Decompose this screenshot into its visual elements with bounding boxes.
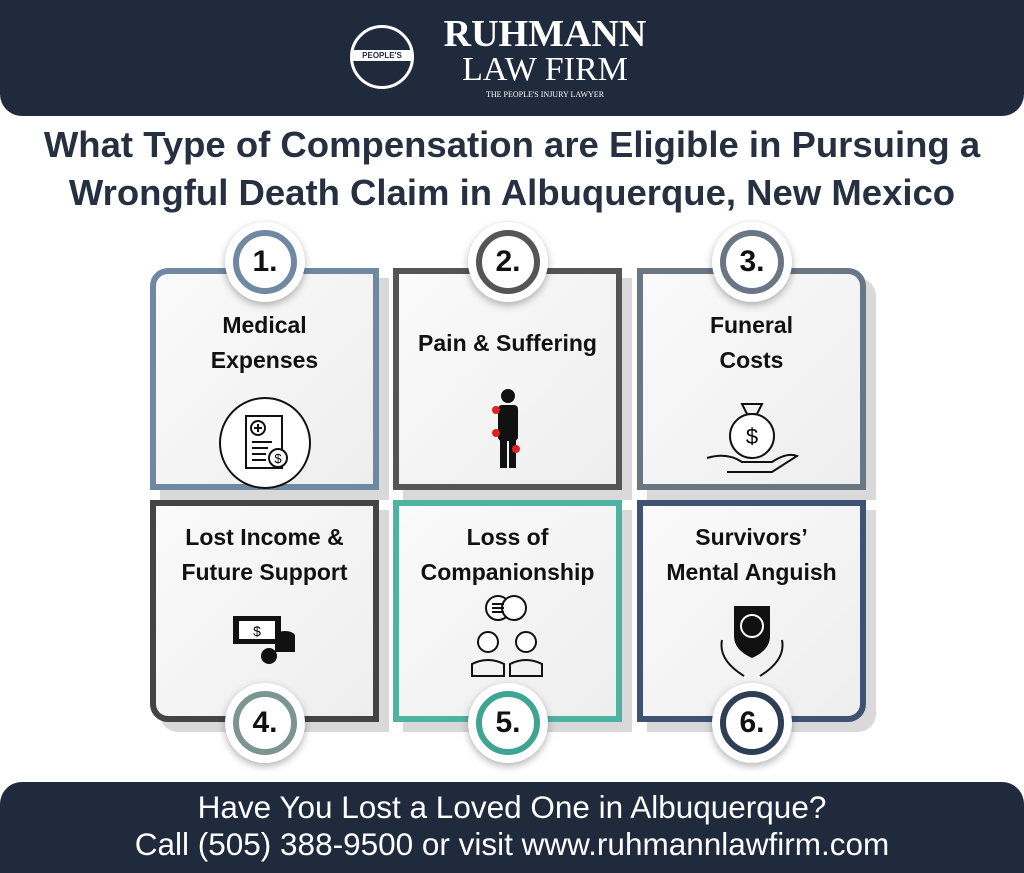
heading: Future Support	[181, 559, 348, 585]
heading: Medical	[222, 312, 307, 338]
heading: Expenses	[211, 347, 318, 373]
badge 3	[712, 222, 792, 302]
badge 6: 6.	[739, 706, 765, 739]
heading	[421, 524, 594, 585]
icon: cash and coins: $	[253, 623, 261, 639]
badge 5: 5.	[495, 706, 521, 739]
icon: cash and coins	[233, 616, 295, 664]
heading: Loss of	[467, 524, 548, 550]
badge 1: 1.	[252, 245, 278, 278]
heading	[211, 312, 318, 373]
footer call to action: Call (505) 388-9500 or visit www.ruhmannlawfirm.com	[135, 826, 889, 862]
heading	[181, 524, 348, 585]
logo seal: PEOPLE'S	[362, 51, 402, 60]
icon: brain in hands	[720, 606, 784, 677]
heading: Companionship	[421, 559, 594, 585]
heading	[710, 312, 793, 373]
badge 1	[225, 222, 305, 302]
footer call to action	[0, 782, 1024, 873]
card 5	[393, 500, 622, 722]
icon: money bag hand: $	[745, 424, 758, 449]
badge 6	[712, 683, 792, 763]
icon: body pain	[492, 389, 520, 468]
badge 4	[225, 683, 305, 763]
header banner	[0, 0, 1024, 116]
heading: Costs	[720, 347, 783, 373]
title	[44, 124, 980, 213]
title: Wrongful Death Claim in Albuquerque, New Mexico	[69, 172, 955, 213]
logo text	[444, 13, 646, 99]
card 6	[637, 500, 866, 722]
badge 2: 2.	[495, 245, 521, 278]
logo seal	[350, 25, 414, 89]
heading: Mental Anguish	[666, 559, 837, 585]
icon: two people talking	[471, 595, 543, 677]
heading: Survivors’	[695, 524, 808, 550]
logo text: THE PEOPLE'S INJURY LAWYER	[486, 90, 604, 99]
heading	[666, 524, 837, 585]
heading: Lost Income &	[185, 524, 344, 550]
icon: medical bill	[219, 397, 311, 489]
card 3	[637, 268, 866, 490]
card 4	[150, 500, 379, 722]
title: What Type of Compensation are Eligible in Pursuing a	[44, 124, 980, 165]
badge 3: 3.	[739, 245, 765, 278]
heading: Funeral	[710, 312, 793, 338]
badge 5	[468, 683, 548, 763]
heading: Pain & Suffering	[418, 330, 597, 356]
card 2	[393, 268, 622, 490]
icon: money bag hand	[706, 403, 800, 473]
logo text: RUHMANN	[444, 13, 646, 55]
card 1	[150, 268, 379, 490]
logo text: LAW FIRM	[462, 51, 628, 88]
footer call to action: Have You Lost a Loved One in Albuquerque?	[198, 789, 826, 825]
badge 4: 4.	[252, 706, 278, 739]
badge 2	[468, 222, 548, 302]
icon: medical bill: $	[274, 451, 282, 466]
